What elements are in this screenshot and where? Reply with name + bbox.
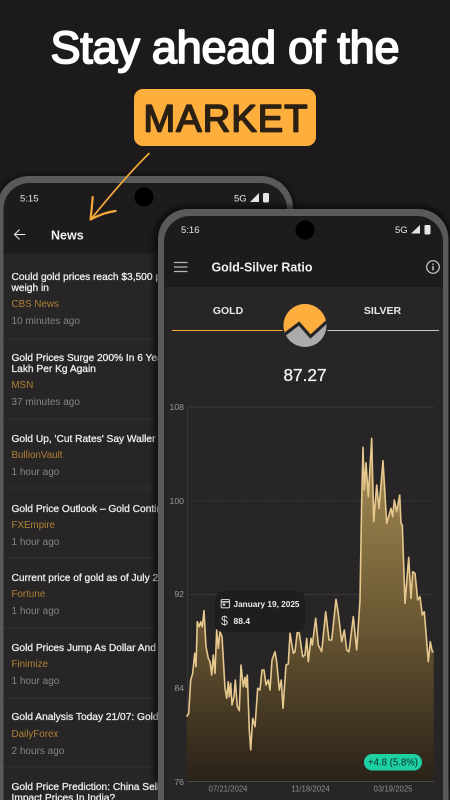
- news item 7: DailyForex: [12, 729, 58, 740]
- news item 2: Gold Prices Surge 200% In 6 Years, Could Hit 1: [12, 353, 228, 364]
- change badge: +4.8 (5.8%): [368, 758, 418, 768]
- news item 6: Gold Prices Jump As Dollar And Yields Fall: [12, 643, 205, 654]
- phone: news screen: [0, 174, 295, 800]
- news item 6: [12, 643, 156, 686]
- news item 7: 2 hours ago: [12, 746, 65, 757]
- news item 1: 10 minutes ago: [12, 316, 80, 327]
- news item 2: [12, 353, 158, 407]
- news item 1: weigh in: [10, 283, 49, 294]
- news item 2: Lakh Per Kg Again: [12, 364, 96, 375]
- icon: info: [427, 261, 439, 273]
- news item 5: Current price of gold as of July 21, 2025: [12, 573, 192, 584]
- news item 8: [12, 782, 158, 800]
- status bar: ratio: 5G: [395, 225, 408, 236]
- title: Stay ahead of the: [50, 22, 400, 73]
- news item 4: Gold Price Outlook – Gold Continues to Rise: [12, 504, 213, 515]
- news item 5: Fortune: [12, 589, 46, 600]
- x axis labels: 07/21/2024: [208, 785, 248, 794]
- icon: dollar: $: [221, 614, 228, 628]
- y axis labels: 76: [174, 777, 184, 787]
- status bar: news: 5:15: [20, 194, 38, 204]
- status bar: ratio: 5:16: [181, 225, 200, 236]
- news item 2: 37 minutes ago: [12, 397, 80, 408]
- news item 7: Gold Analysis Today 21/07: Gold Rises Again: [12, 712, 215, 723]
- news item 3: 1 hour ago: [12, 467, 60, 478]
- news item 6: 1 hour ago: [12, 676, 60, 687]
- phone frame: ratio: [158, 209, 448, 800]
- news item 1: [11, 272, 158, 326]
- change badge: [364, 754, 422, 770]
- y axis labels: [170, 402, 184, 787]
- ratio value: 87.27: [284, 365, 326, 385]
- news item 4: 1 hour ago: [12, 537, 60, 548]
- tooltip: [215, 591, 305, 632]
- line chart: [170, 402, 434, 794]
- news item 6: Finimize: [12, 659, 49, 670]
- tooltip: January 19, 2025: [234, 599, 300, 609]
- news header: [14, 229, 84, 240]
- y axis labels: 100: [170, 496, 184, 506]
- news item 1: Could gold prices reach $3,500 per ounce? Experts: [12, 272, 244, 283]
- badge: MARKET: MARKET: [144, 98, 308, 140]
- news item 5: 1 hour ago: [12, 606, 60, 617]
- icon: menu: [174, 262, 188, 272]
- area fill: [187, 438, 434, 781]
- news item 4: FXEmpire: [12, 520, 56, 531]
- ratio screen: [164, 216, 443, 800]
- news item 3: [12, 434, 156, 477]
- news item 5: [12, 573, 158, 616]
- news screen: [0, 183, 287, 800]
- ratio header: [174, 261, 439, 275]
- news item 7: [12, 712, 158, 756]
- phone frame: news: [0, 176, 293, 800]
- y axis labels: 108: [170, 402, 184, 412]
- x axis labels: 11/18/2024: [291, 785, 330, 794]
- price line: [187, 438, 434, 750]
- arrow: [90, 154, 149, 220]
- news item 8: Gold Price Prediction: China Sells Gold, Will It: [12, 782, 219, 793]
- news item 3: BullionVault: [12, 450, 63, 461]
- news item 1: CBS News: [12, 299, 59, 310]
- news header: News: [51, 228, 84, 242]
- tabs: SILVER: [364, 305, 401, 317]
- status bar: ratio: [181, 220, 430, 240]
- ratio header: Gold-Silver Ratio: [212, 261, 313, 275]
- badge: MARKET: [134, 89, 316, 146]
- news item 2: MSN: [12, 380, 33, 391]
- y axis labels: 84: [174, 683, 184, 693]
- y axis labels: 92: [174, 589, 184, 599]
- icon: calendar: [221, 600, 230, 608]
- news item 3: Gold Up, 'Cut Rates' Say Waller and Trump: [12, 434, 207, 445]
- x axis labels: [208, 786, 412, 792]
- x axis labels: 03/19/2025: [373, 785, 413, 794]
- logo: gold and silver: [282, 304, 328, 347]
- tabs: GOLD: [213, 305, 244, 317]
- status bar: news: [20, 188, 269, 206]
- phone: gold-silver ratio: [153, 205, 450, 800]
- news item 4: [12, 504, 158, 547]
- tabs: [172, 305, 439, 330]
- status bar: news: 5G: [234, 194, 247, 204]
- tooltip: 88.4: [234, 616, 250, 626]
